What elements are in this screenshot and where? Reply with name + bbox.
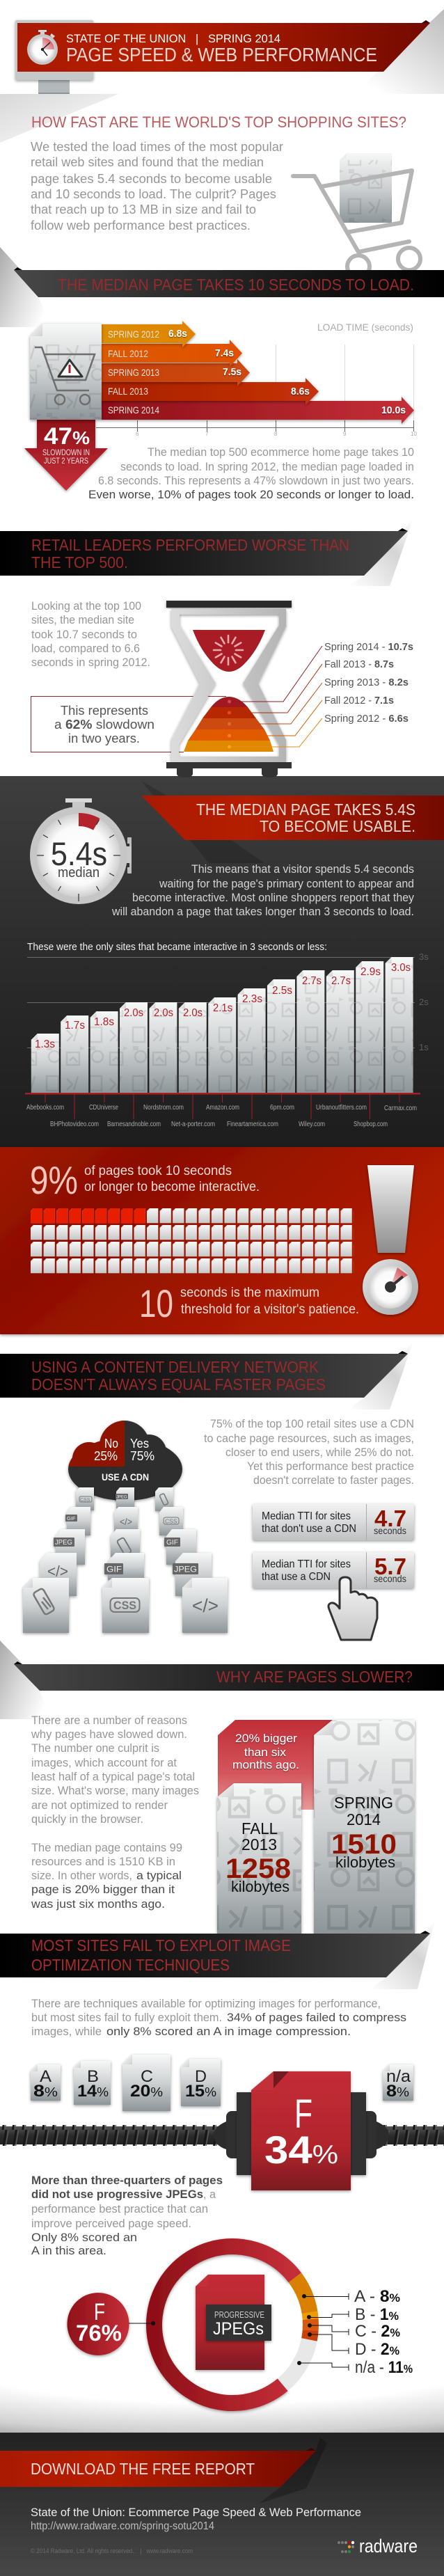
slower text: least half of a typical page's total [31, 1770, 195, 1783]
band: retail leaders [0, 528, 408, 576]
usable text: will abandon a page that takes longer than 3 seconds to load. [111, 905, 414, 918]
site labels: BHPhotovideo.com [50, 1120, 99, 1128]
intro text: that reach up to 13 MB in size and fail to [31, 203, 256, 216]
grade A [31, 2064, 61, 2101]
drop lines [45, 1093, 399, 1119]
bar 2.9s [356, 961, 383, 1093]
band: why slower: WHY ARE PAGES SLOWER? [216, 1668, 413, 1686]
site labels: Barnesandnoble.com [107, 1120, 161, 1128]
bar 2.1s [208, 997, 236, 1093]
arrow: spring 2014 [102, 397, 414, 424]
axis: 10 [411, 431, 417, 437]
right triangle shade [348, 519, 413, 586]
slower text: The number one culprit is [31, 1741, 159, 1755]
icon: shopping cart with page [293, 153, 420, 278]
load time text: Even worse, 10% of pages took 20 seconds or longer to load. [88, 488, 414, 501]
icon: 5.4s stopwatch [30, 798, 132, 904]
bar 2.0s net-a-porter: 2.0s [183, 1007, 203, 1019]
usable text: waiting for the page's primary content to appear and [159, 877, 414, 890]
hourglass legend: Fall 2013 - 8.7s [324, 658, 394, 670]
grade A: A [40, 2067, 51, 2086]
grade D: 15% [185, 2082, 216, 2101]
grade n/a: n/a [386, 2067, 411, 2086]
grade B: 14% [77, 2082, 109, 2101]
top 100 text: load, compared to 6.6 [31, 642, 140, 655]
intro text: We tested the load times of the most popular [31, 140, 283, 154]
usable text [111, 862, 414, 918]
arrow: 47% slowdown: SLOWDOWN IN [42, 448, 90, 457]
9% stat: 9% [30, 1158, 78, 1203]
hourglass legend [228, 641, 413, 749]
file row 2 css [159, 1507, 183, 1535]
band: CDN: USING A CONTENT DELIVERY NETWORK [31, 1358, 319, 1376]
slower text: page is 20% bigger than it [31, 1883, 175, 1896]
callout: 62% slowdown: in two years. [68, 731, 140, 745]
bar 2.7s urban [326, 970, 354, 1093]
band: retail leaders: RETAIL LEADERS PERFORMED WORSE THAN [31, 536, 349, 554]
grade B: B [87, 2067, 99, 2086]
callout: 62% slowdown: a 62% slowdown [54, 717, 154, 732]
icon: CDN cloud: 25% [94, 1449, 118, 1463]
slower text: There are a number of reasons [31, 1714, 187, 1727]
ribbon [17, 20, 430, 72]
file row 1 [76, 1487, 94, 1510]
file row 2 css: CSS [165, 1517, 177, 1524]
slower text: size. What's worse, many images [31, 1784, 199, 1797]
icon: files flowing from cloud [23, 1487, 228, 1633]
title [66, 32, 377, 65]
optimization text: only 8% scored an A in image compression. [106, 2025, 351, 2038]
file row 3 gif: GIF [166, 1539, 178, 1547]
site labels: Amazon.com [206, 1103, 239, 1112]
logo: radware: radware [359, 2536, 418, 2557]
axis [96, 345, 417, 437]
chart: load time [96, 321, 417, 437]
9% stat: or longer to become interactive. [84, 1180, 260, 1194]
icon: monitor [15, 20, 93, 94]
page: progressive JPEGs: PROGRESSIVE [214, 2309, 264, 2320]
donut legend: B - 1% [355, 2305, 399, 2324]
donut legend: D - 2% [355, 2340, 399, 2359]
panel: header [15, 9, 444, 94]
icon: page with cart and warning [30, 324, 102, 420]
load time text: The median top 500 ecommerce home page takes 10 [148, 445, 414, 459]
optimization text: There are techniques available for optimizing images for performance, [31, 1997, 381, 2010]
hourglass legend: Spring 2012 - 6.6s [324, 713, 409, 725]
panel: dark usable section [0, 776, 444, 1147]
bar 2.1s: 2.1s [213, 1002, 232, 1014]
ribbon: 5.4s usable [141, 781, 444, 863]
optimization text [31, 1997, 406, 2038]
bar chart: interactive sites: 2s [419, 997, 429, 1007]
arrow: 47% slowdown: 47% [44, 423, 90, 450]
top 100 text: Looking at the top 100 [31, 599, 141, 613]
progressive JPEGs text: Only 8% scored an [31, 2231, 137, 2244]
icon: CDN cloud [68, 1421, 182, 1501]
grade D: D [195, 2067, 207, 2086]
slower text [31, 1714, 199, 1911]
band: image optimization: MOST SITES FAIL TO EXPLOIT IMAGE [31, 1936, 291, 1954]
intro text: retail web sites and found that the median [31, 155, 264, 169]
F 76% bubble [67, 2293, 155, 2355]
icon: hourglass [166, 601, 292, 777]
logo: radware [338, 2536, 418, 2557]
page: fall 2013: FALL [241, 1819, 278, 1838]
bottom fade [0, 2363, 444, 2433]
arrow: spring 2013: SPRING 2013 [108, 367, 159, 378]
file row 3 scroll [111, 1529, 140, 1557]
bar chart: interactive sites: 1s [419, 1042, 429, 1052]
file row 1 scroll [155, 1487, 173, 1511]
arrow: 47% slowdown: JUST 2 YEARS [44, 456, 88, 466]
callout: 62% slowdown [31, 696, 226, 752]
button: no CDN: Median TTI for sites [262, 1510, 351, 1522]
band: median 10 seconds: THE MEDIAN PAGE TAKES 10 SECONDS TO LOAD. [58, 276, 414, 294]
site labels [26, 1103, 417, 1128]
icon: CDN cloud: Yes [130, 1437, 149, 1451]
progressive JPEGs text [31, 2174, 223, 2257]
progressive JPEGs text: improve perceived page speed. [31, 2217, 191, 2230]
site labels: Fineartamerica.com [227, 1120, 278, 1128]
callout: 62% slowdown: This represents [61, 703, 148, 718]
bar 3.0s: 3.0s [391, 962, 411, 974]
file front code [182, 1578, 228, 1633]
site labels: Wiley.com [299, 1120, 325, 1128]
sand bottom layers [181, 696, 278, 752]
top 100 text: seconds in spring 2012. [31, 656, 150, 669]
site labels: CDUniverse [89, 1103, 118, 1112]
file row 1 jpeg [116, 1487, 134, 1508]
band: CDN [0, 1351, 408, 1398]
top 100 text: took 10.7 seconds to [31, 628, 137, 641]
red tag: 20% bigger: months ago. [232, 1758, 299, 1771]
page: spring 2014: 2014 [347, 1810, 381, 1828]
button: no CDN: 4.7 [374, 1506, 406, 1531]
9% stat: of pages took 10 seconds [84, 1164, 232, 1178]
hourglass legend: Fall 2012 - 7.1s [324, 695, 394, 706]
file row 1: CSS [80, 1498, 90, 1503]
icon: hand cursor [328, 1577, 377, 1640]
band: image optimization [0, 1931, 430, 1977]
file row 1 jpeg: JPEG [116, 1495, 127, 1499]
arrow: fall 2012: 7.4s [215, 347, 234, 359]
site labels: Shopbop.com [354, 1120, 388, 1128]
site labels: 6pm.com [270, 1103, 294, 1112]
heading: how fast: HOW FAST ARE THE WORLD'S TOP SHOPPING SITES? [31, 113, 406, 131]
slower text: are not optimized to render [31, 1799, 168, 1812]
progressive JPEGs text: did not use progressive JPEGs [31, 2188, 203, 2201]
site labels: Net-a-porter.com [171, 1120, 215, 1128]
bar 2.3s [238, 988, 266, 1093]
left triangle shade [0, 247, 52, 327]
file row 4 jpeg: JPEG [174, 1565, 197, 1574]
bar 1.3s [31, 1034, 59, 1093]
file row 3 jpeg: JPEG [55, 1539, 72, 1547]
button: no CDN: that don't use a CDN [262, 1523, 356, 1535]
arrow: fall 2013 [102, 378, 319, 405]
load time text [88, 445, 414, 501]
file row 4 gif [104, 1553, 144, 1580]
file row 3 gif [164, 1529, 196, 1565]
title: STATE OF THE UNION | SPRING 2014 [66, 32, 280, 45]
arrow: spring 2014: 10.0s [381, 404, 406, 416]
arrow: spring 2012: 6.8s [168, 328, 187, 340]
ribbon: 5.4s usable: THE MEDIAN PAGE TAKES 5.4S [196, 800, 415, 819]
bar 1.7s: 1.7s [65, 1020, 85, 1032]
arrow: spring 2012: SPRING 2012 [108, 329, 159, 340]
clamp with F page [214, 2071, 389, 2190]
load time text: seconds to load. In spring 2012, the median page loaded in [120, 460, 414, 473]
top 100 text: sites, the median site [31, 613, 134, 626]
button: use CDN: seconds [374, 1574, 406, 1584]
ribbon: 5.4s usable: TO BECOME USABLE. [260, 817, 415, 835]
band: why slower [14, 1661, 444, 1691]
bar 2.7s urban: 2.7s [331, 975, 351, 987]
left triangle shade [0, 1641, 52, 1719]
clamp with F page: F [294, 2092, 312, 2137]
grade B [74, 2061, 111, 2105]
button: use CDN: that use a CDN [262, 1571, 331, 1583]
ribbon: download [0, 2448, 316, 2487]
axis: 7 [205, 431, 209, 437]
site labels: Nordstrom.com [143, 1103, 184, 1112]
panel: red 9% section [0, 1147, 444, 1334]
arrow: fall 2012 [102, 340, 242, 367]
bar chart: interactive sites: 3s [419, 951, 429, 962]
segment D [309, 2330, 310, 2340]
grade D [181, 2059, 221, 2106]
grade A: 8% [33, 2082, 58, 2101]
arrow: fall 2013: FALL 2013 [108, 386, 148, 397]
icon: CDN cloud: No [104, 1437, 118, 1451]
intro text: page takes 5.4 seconds to become usable [31, 172, 272, 186]
donut legend: A - 8% [354, 2287, 400, 2306]
axis title: LOAD TIME (seconds) [317, 322, 413, 333]
bar 2.7s wiley: 2.7s [302, 975, 322, 987]
bar 2.5s [267, 979, 295, 1093]
axis: 8 [274, 431, 278, 437]
right triangle shade [369, 1921, 435, 1989]
progressive JPEGs text: , a [203, 2188, 216, 2201]
file front css: CSS [113, 1599, 136, 1612]
copyright: © 2014 Radware, Ltd. All rights reserved.. | www.radware.com [31, 2547, 193, 2554]
intro text: follow web performance best practices. [31, 219, 251, 232]
page: progressive JPEGs: JPEGs [213, 2319, 264, 2339]
optimization text: 34% of pages failed to compress [227, 2011, 406, 2024]
hourglass legend: Spring 2013 - 8.2s [324, 677, 409, 688]
clamp with F page: 34% [264, 2128, 338, 2172]
band: CDN: DOESN'T ALWAYS EQUAL FASTER PAGES [31, 1375, 326, 1393]
file front scroll [23, 1578, 69, 1633]
report title and URL: http://www.radware.com/spring-sotu2014 [31, 2520, 214, 2532]
progressive JPEGs text: performance best practice that can [31, 2202, 208, 2215]
file front code: </> [192, 1595, 219, 1616]
slower text: size. In other words, [31, 1869, 132, 1882]
file front css [102, 1578, 149, 1633]
bar 2.0s net-a-porter [179, 1002, 207, 1093]
optimization text: images, while [31, 2025, 102, 2038]
load time text: 6.8 seconds. This represents a 47% slowdown in just two years. [98, 474, 414, 487]
F 76% bubble: 76% [76, 2321, 122, 2346]
file row 2 code [114, 1507, 138, 1533]
CDN text: Yet this performance best practice [247, 1460, 414, 1473]
sand top with spinner [193, 630, 265, 672]
file row 2 gif: GIF [67, 1515, 76, 1522]
bar 2.7s wiley [296, 970, 324, 1093]
chart title: These were the only sites that became interactive in 3 seconds or less: [27, 942, 327, 953]
band: image optimization: OPTIMIZATION TECHNIQUES [31, 1956, 230, 1974]
CDN text: closer to end users, while 25% do not. [225, 1446, 414, 1459]
grade n/a [383, 2064, 413, 2101]
corner shade [354, 9, 444, 94]
bar 2.0s barnes [120, 1002, 148, 1093]
file row 4 code [40, 1553, 77, 1596]
icon: CDN cloud: 75% [130, 1449, 154, 1463]
site labels: Carmax.com [384, 1104, 417, 1112]
9% stat [30, 1158, 260, 1203]
icon: exclamation mark [363, 1165, 418, 1315]
arrow: spring 2013: 7.5s [223, 366, 241, 378]
segment C [303, 2319, 319, 2330]
F 76% bubble: F [94, 2299, 105, 2325]
site labels: Abebooks.com [26, 1103, 64, 1112]
10 seconds text [139, 1281, 359, 1325]
CDN text: 75% of the top 100 retail sites use a CDN [210, 1417, 414, 1430]
file row 4 jpeg [173, 1553, 212, 1596]
donut legend: C - 2% [355, 2322, 400, 2341]
10 seconds text: seconds is the maximum [180, 1286, 319, 1300]
page: spring 2014: SPRING [334, 1794, 393, 1812]
panel: footer [0, 2433, 444, 2576]
segment A [295, 2277, 310, 2312]
bar 2.0s nordstrom: 2.0s [154, 1007, 173, 1019]
segment n/a [283, 2340, 309, 2385]
slower text: a typical [136, 1869, 182, 1882]
progressive JPEGs text: More than three-quarters of pages [31, 2174, 223, 2187]
page: spring 2014: 1510 [331, 1829, 397, 1860]
icon: 5.4s stopwatch: median [58, 865, 100, 880]
usable text: become interactive. Most online shoppers report that they [132, 891, 414, 904]
bar 1.8s [90, 1011, 118, 1093]
title: PAGE SPEED & WEB PERFORMANCE [66, 44, 377, 65]
bar 2.5s: 2.5s [272, 985, 292, 997]
site labels: Urbanoutfitters.com [316, 1103, 367, 1112]
file row 2 code: </> [120, 1516, 132, 1527]
slower text: why pages have slowed down. [31, 1728, 187, 1741]
bar 2.0s nordstrom [149, 1002, 177, 1093]
10 seconds text: 10 [139, 1281, 173, 1325]
grade C [122, 2055, 171, 2111]
page: fall 2013: 1258 [225, 1854, 291, 1884]
bar 1.7s [61, 1016, 88, 1093]
button: use CDN: Median TTI for sites [262, 1558, 351, 1570]
grade n/a: 8% [386, 2082, 409, 2101]
left corner shade [0, 94, 118, 143]
segment F [154, 2247, 295, 2403]
donut legend: n/a - 11% [355, 2358, 413, 2377]
slower text: quickly in the browser. [31, 1812, 143, 1826]
red tag: 20% bigger [218, 1720, 333, 1810]
10 seconds text: threshold for a visitor's patience. [181, 1302, 359, 1317]
CDN text [204, 1417, 414, 1487]
button: no CDN: seconds [374, 1526, 406, 1536]
slower text: images, which account for at [31, 1756, 177, 1769]
file row 2 gif [65, 1507, 90, 1535]
right triangle shade [348, 1341, 413, 1409]
grade C: 20% [130, 2082, 163, 2101]
bar 2.0s barnes: 2.0s [124, 1007, 143, 1019]
bar 2.3s: 2.3s [242, 993, 262, 1005]
slower text: resources and is 1510 KB in [31, 1855, 175, 1868]
bar 1.8s: 1.8s [94, 1016, 114, 1028]
bar 1.3s: 1.3s [35, 1038, 55, 1050]
red tag: 20% bigger: than six [244, 1746, 287, 1759]
arrow: fall 2012: FALL 2012 [108, 348, 148, 359]
arrow: 47% slowdown [24, 420, 108, 491]
button: use CDN [253, 1552, 414, 1588]
grade C: C [141, 2067, 153, 2086]
arrow: spring 2013 [102, 359, 250, 386]
arrow: spring 2014: SPRING 2014 [108, 404, 159, 416]
donut legend [297, 2287, 413, 2377]
bar 3.0s [386, 957, 413, 1093]
page: fall 2013: 2013 [241, 1835, 277, 1854]
axis: 9 [343, 431, 347, 437]
arrow: spring 2012 [102, 321, 196, 347]
slower text: was just six months ago. [31, 1897, 165, 1911]
top 100 text [31, 599, 150, 669]
red tag: 20% bigger: 20% bigger [235, 1732, 297, 1745]
page: spring 2014: kilobytes [335, 1854, 395, 1871]
intro text: and 10 seconds to load. The culprit? Pages [31, 187, 276, 201]
intro text [31, 140, 283, 232]
band: median 10 seconds [14, 267, 444, 297]
button: no CDN [253, 1504, 414, 1540]
file row 4 code: </> [47, 1563, 68, 1580]
ribbon: download: DOWNLOAD THE FREE REPORT [31, 2460, 255, 2478]
report title and URL: State of the Union: Ecommerce Page Speed & Web Performance [31, 2506, 361, 2519]
slower text: The median page contains 99 [31, 1841, 182, 1854]
progressive JPEGs text: A in this area. [31, 2244, 106, 2257]
axis: 6 [136, 431, 139, 437]
screw rod [0, 2125, 444, 2146]
page: fall 2013 [217, 1783, 301, 1934]
bar chart: interactive sites [25, 951, 429, 1128]
button: use CDN: 5.7 [374, 1554, 406, 1579]
bar 2.9s: 2.9s [360, 966, 381, 978]
file row 3 jpeg [54, 1529, 85, 1565]
arrow: fall 2013: 8.6s [291, 386, 310, 397]
CDN text: to cache page resources, such as images, [204, 1432, 414, 1445]
page: progressive JPEGs [196, 2275, 271, 2370]
band: retail leaders: THE TOP 500. [31, 553, 128, 571]
report title and URL [31, 2506, 361, 2532]
CDN text: doesn't correlate to faster pages. [253, 1473, 414, 1487]
usable text: This means that a visitor spends 5.4 seconds [191, 862, 414, 876]
file row 4 gif: GIF [106, 1565, 122, 1574]
donut chart: progressive JPEGs [154, 2247, 310, 2403]
icon: 5.4s stopwatch: 5.4s [51, 835, 107, 872]
page: spring 2014 [314, 1720, 415, 1934]
icon: CDN cloud: USE A CDN [102, 1471, 149, 1483]
icon: stopwatch [27, 30, 58, 65]
hourglass legend: Spring 2014 - 10.7s [324, 641, 413, 653]
page: fall 2013: kilobytes [231, 1878, 290, 1895]
optimization text: but most sites fail to fully exploit them. [31, 2011, 222, 2024]
baseline [25, 1093, 420, 1094]
page waffle chart [31, 1208, 354, 1275]
